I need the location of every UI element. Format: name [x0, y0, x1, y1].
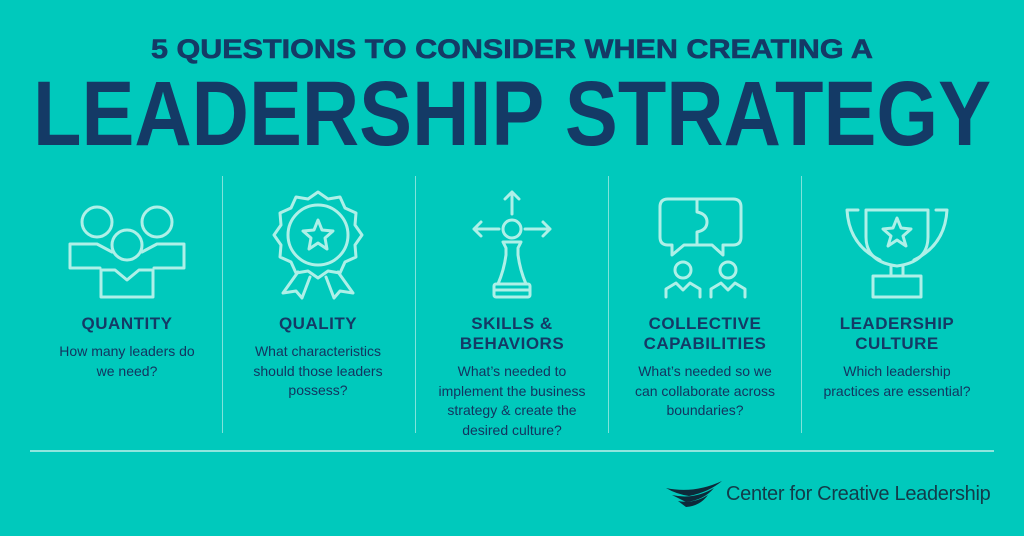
- column: skills & behaviors: [438, 314, 586, 438]
- logo: [666, 481, 990, 507]
- column: skills & behaviors: What’s needed to: [458, 363, 566, 379]
- column: quantity: [59, 314, 195, 378]
- column: skills & behaviors: implement the business: [438, 382, 586, 398]
- icon: speech bubbles puzzle: [660, 199, 745, 297]
- column: skills & behaviors: BEHAVIORS: [460, 334, 564, 353]
- column: quality: What characteristics: [255, 343, 381, 359]
- column: skills & behaviors: desired culture?: [462, 422, 562, 438]
- icon: logo wing: [666, 481, 722, 507]
- column: skills & behaviors: strategy & create the: [447, 402, 577, 418]
- column: skills & behaviors: SKILLS &: [471, 314, 553, 333]
- column: leadership culture: CULTURE: [855, 334, 939, 353]
- column: quality: possess?: [288, 382, 348, 398]
- column: collective capabilities: boundaries?: [666, 402, 744, 418]
- column: leadership culture: LEADERSHIP: [840, 314, 954, 333]
- icons: [68, 190, 948, 300]
- column: quantity: QUANTITY: [82, 314, 172, 333]
- icon: people: [70, 207, 184, 297]
- column: leadership culture: practices are essential?: [823, 382, 971, 398]
- column: quality: QUALITY: [279, 314, 357, 333]
- logo text: Center for Creative Leadership: [726, 483, 990, 505]
- column: collective capabilities: [635, 314, 775, 418]
- column: collective capabilities: What’s needed so we: [638, 363, 772, 379]
- column: leadership culture: Which leadership: [843, 363, 951, 379]
- column: quality: should those leaders: [253, 362, 383, 378]
- column: leadership culture: [823, 314, 971, 399]
- column: quantity: we need?: [97, 362, 157, 378]
- column: quantity: How many leaders do: [59, 343, 195, 359]
- column: collective capabilities: COLLECTIVE: [649, 314, 761, 333]
- title: [33, 34, 991, 160]
- icon: award badge: [274, 192, 362, 298]
- icon: trophy: [847, 210, 947, 297]
- column: collective capabilities: can collaborate across: [635, 382, 775, 398]
- icon: pawn with arrows: [474, 192, 550, 297]
- column: quality: [253, 314, 383, 398]
- column: collective capabilities: CAPABILITIES: [644, 334, 766, 353]
- title line 1: 5 QUESTIONS TO CONSIDER WHEN CREATING A: [151, 34, 873, 64]
